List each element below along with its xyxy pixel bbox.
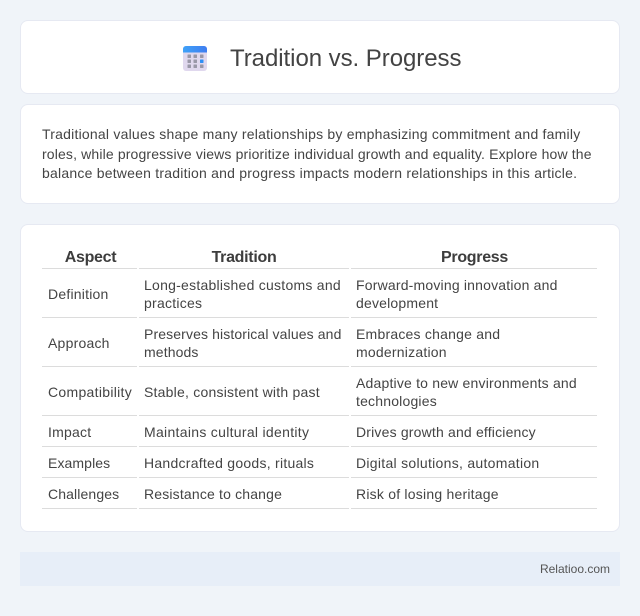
column headings [65,249,508,266]
row: Approach: Preserves historical values and [144,326,341,342]
row: Examples [48,455,540,471]
row: Approach: Embraces change and [356,326,500,342]
row: Examples: Handcrafted goods, rituals [144,455,314,471]
row: Approach: methods [144,344,199,360]
row: Impact: Impact [48,424,91,440]
intro paragraph [42,126,592,181]
intro paragraph: roles, while progressive views prioritize individual growth and equality. Explore how the [42,146,592,162]
row: Compatibility: Stable, consistent with past [144,384,320,400]
row: Definition: Long-established customs and [144,277,341,293]
panel: comparison table [20,224,620,532]
row: Approach: Approach [48,335,110,351]
row: Impact: Maintains cultural identity [144,424,309,440]
column headings: Aspect [65,249,116,266]
row: Compatibility: Adaptive to new environments and [356,375,577,391]
row: Definition: practices [144,295,202,311]
row: Challenges: Resistance to change [144,486,282,502]
row: Compatibility [48,375,577,409]
icon: calendar [183,46,207,71]
row: Compatibility: Compatibility [48,384,132,400]
row: Approach: modernization [356,344,447,360]
panel: header [20,20,620,94]
row: Impact: Drives growth and efficiency [356,424,536,440]
intro paragraph: balance between tradition and progress impacts modern relationships in this article. [42,165,577,181]
row: Examples: Examples [48,455,110,471]
footer brand: Relatioo.com [540,562,610,576]
column headings: Tradition [212,249,276,266]
row: Challenges: Risk of losing heritage [356,486,499,502]
intro paragraph: Traditional values shape many relationships by emphasizing commitment and family [42,126,580,142]
row: Approach [48,326,500,360]
row: Definition: Definition [48,286,109,302]
row: Examples: Digital solutions, automation [356,455,540,471]
title: Tradition vs. Progress [230,45,461,72]
row: Definition: Forward-moving innovation and [356,277,558,293]
row: Challenges: Challenges [48,486,119,502]
row: Impact [48,424,536,440]
panel: intro text [20,104,620,204]
panel: footer [20,552,620,586]
row: Compatibility: technologies [356,393,437,409]
row: Challenges [48,486,499,502]
column headings: Progress [441,249,508,266]
row: Definition [48,277,558,311]
row: Definition: development [356,295,438,311]
